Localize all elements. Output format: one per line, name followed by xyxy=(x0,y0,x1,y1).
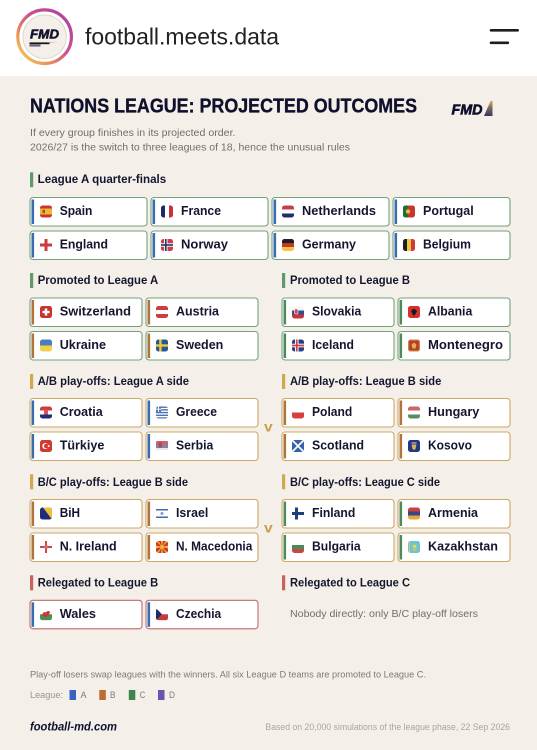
team: England: England xyxy=(60,237,108,252)
team: Ukraine: Ukraine xyxy=(60,337,106,352)
panel: Promoted to League A xyxy=(30,273,258,360)
heading: League A quarter-finals: League A quarter-finals xyxy=(38,174,166,186)
team: Slovakia: Slovakia xyxy=(312,304,362,319)
heading: A/B play-offs League B side: A/B play-offs: League B side xyxy=(290,376,441,388)
team: Serbia: Serbia xyxy=(176,438,214,453)
team: Norway xyxy=(151,231,268,260)
arrow: A/B versus marker: v xyxy=(264,418,273,434)
team: Sweden: Sweden xyxy=(176,337,223,352)
header bar xyxy=(18,10,519,64)
team: Czechia: Czechia xyxy=(176,606,222,621)
team: Kazakhstan: Kazakhstan xyxy=(428,539,498,554)
team: Belgium xyxy=(393,231,510,260)
subtitle xyxy=(30,127,350,154)
team: Albania xyxy=(398,298,510,326)
legend: leagues: B xyxy=(110,690,116,701)
team: Greece: Greece xyxy=(176,404,217,419)
legend: leagues: League: xyxy=(30,690,63,701)
team: Iceland xyxy=(282,332,394,360)
heading: Promoted to League A: Promoted to League A xyxy=(38,275,158,287)
team: Poland xyxy=(282,398,394,427)
team: Wales xyxy=(30,600,142,629)
team: Wales: Wales xyxy=(60,606,96,621)
team: N. Macedonia xyxy=(146,533,258,562)
heading: Promoted to League B: Promoted to League B xyxy=(290,275,410,287)
team: Netherlands: Netherlands xyxy=(302,203,376,218)
panel: A/B play-offs League B side xyxy=(282,374,510,460)
legend: leagues xyxy=(30,690,175,701)
team: Switzerland: Switzerland xyxy=(60,304,131,319)
team: England xyxy=(30,231,147,260)
footer: source: Based on 20,000 simulations of the league phase, 22 Sep 2026 xyxy=(265,722,510,732)
panel: Promoted to League B xyxy=(282,273,510,360)
team: Austria xyxy=(146,298,258,326)
panel: League A quarter-finals xyxy=(30,172,510,260)
team: N. Ireland xyxy=(30,533,142,562)
team: Poland: Poland xyxy=(312,404,352,419)
team: Sweden xyxy=(146,332,258,360)
icon: menu xyxy=(490,29,519,44)
team: Kazakhstan xyxy=(398,533,510,562)
team: Hungary: Hungary xyxy=(428,404,480,419)
title: NATIONS LEAGUE: PROJECTED OUTCOMES xyxy=(30,96,417,118)
team: Greece xyxy=(146,398,258,427)
team: Armenia xyxy=(398,500,510,528)
team: N. Macedonia: N. Macedonia xyxy=(176,539,253,554)
team: Portugal xyxy=(393,198,510,226)
icon: FMD round logo: FMD xyxy=(30,27,60,42)
team: BiH xyxy=(30,500,142,528)
team: Austria: Austria xyxy=(176,304,220,319)
panel: B/C play-offs League C side xyxy=(282,474,510,562)
team: N. Ireland: N. Ireland xyxy=(60,539,117,554)
footnote: Play-off losers swap leagues with the winners. All six League D teams are promoted to League C. xyxy=(30,670,426,680)
team: Bulgaria: Bulgaria xyxy=(312,539,361,554)
team: Türkiye: Türkiye xyxy=(60,438,104,453)
panel: B/C play-offs League B side xyxy=(30,474,258,562)
legend: leagues: C xyxy=(140,690,145,701)
icon: FMD small logo: FMD xyxy=(452,103,483,119)
panel: Relegated to League C xyxy=(282,575,478,620)
team: Finland: Finland xyxy=(312,505,355,520)
heading: B/C play-offs League B side: B/C play-offs: League B side xyxy=(38,477,188,489)
team: Armenia: Armenia xyxy=(428,505,479,520)
legend: leagues: A xyxy=(80,690,87,701)
team: Slovakia xyxy=(282,298,394,326)
heading: A/B play-offs League A side: A/B play-offs: League A side xyxy=(38,376,189,388)
team: Germany xyxy=(272,231,389,260)
text: nobody directly: Nobody directly: only B/C play-off losers xyxy=(290,608,478,620)
team: Kosovo xyxy=(398,432,510,460)
team: Kosovo: Kosovo xyxy=(428,438,472,453)
footer: website: football-md.com xyxy=(30,722,117,734)
legend: leagues: D xyxy=(169,690,175,701)
team: Israel xyxy=(146,500,258,528)
team: Bulgaria xyxy=(282,533,394,562)
panel: Relegated to League B xyxy=(30,575,258,629)
icon: FMD round logo xyxy=(18,10,71,64)
team: Albania: Albania xyxy=(428,304,473,319)
team: Scotland: Scotland xyxy=(312,438,364,453)
team: Croatia xyxy=(30,398,142,427)
team: Montenegro: Montenegro xyxy=(428,337,503,352)
team: Germany: Germany xyxy=(302,237,357,252)
panel: A/B play-offs League A side xyxy=(30,374,258,460)
team: Hungary xyxy=(398,398,510,427)
arrow: B/C versus marker: v xyxy=(264,520,273,536)
team: France xyxy=(151,198,268,226)
team: Netherlands xyxy=(272,198,389,226)
heading: Relegated to League B: Relegated to League B xyxy=(38,577,158,589)
icon: FMD small logo xyxy=(452,101,492,119)
team: Spain: Spain xyxy=(60,203,92,218)
team: Iceland: Iceland xyxy=(312,337,354,352)
heading: Relegated to League C: Relegated to League C xyxy=(290,577,410,589)
team: Portugal: Portugal xyxy=(423,203,474,218)
team: Montenegro xyxy=(398,332,510,360)
team: Serbia xyxy=(146,432,258,460)
team: Belgium: Belgium xyxy=(423,237,471,252)
team: Israel: Israel xyxy=(176,505,208,520)
account name: football.meets.data xyxy=(85,24,279,50)
team: France: France xyxy=(181,203,221,218)
team: Spain xyxy=(30,198,147,226)
team: Norway: Norway xyxy=(181,237,229,252)
team: Finland xyxy=(282,500,394,528)
heading: B/C play-offs League C side: B/C play-offs: League C side xyxy=(290,477,440,489)
team: Croatia: Croatia xyxy=(60,404,103,419)
subtitle: 2026/27 is the switch to three leagues of 18, hence the unusual rules xyxy=(30,142,350,154)
subtitle: If every group finishes in its projected order. xyxy=(30,127,236,139)
team: Türkiye xyxy=(30,432,142,460)
team: Switzerland xyxy=(30,298,142,326)
team: Czechia xyxy=(146,600,258,629)
team: BiH: BiH xyxy=(60,505,80,520)
team: Ukraine xyxy=(30,332,142,360)
team: Scotland xyxy=(282,432,394,460)
